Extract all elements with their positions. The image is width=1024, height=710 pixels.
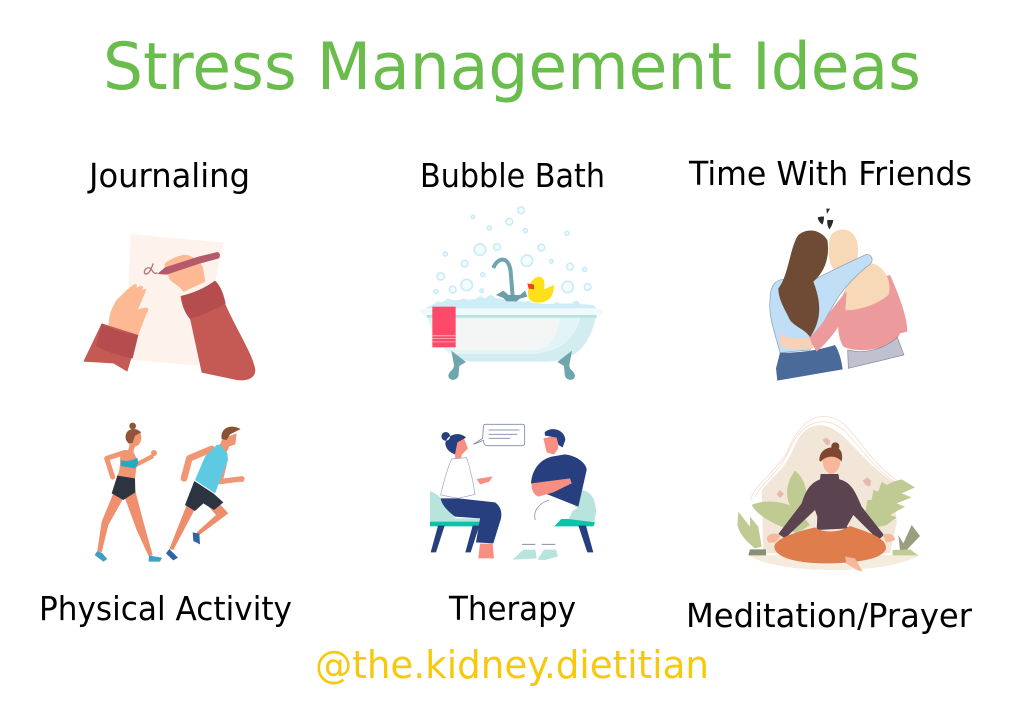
tub panel — [455, 319, 560, 350]
left cuff — [96, 323, 138, 358]
label: Time With Friends: Time With Friends — [688, 154, 972, 193]
woman shoes — [95, 551, 162, 562]
legs — [774, 526, 886, 563]
man hair — [221, 427, 241, 440]
therapist — [441, 432, 501, 558]
foot — [845, 557, 863, 571]
foam — [425, 295, 597, 308]
client arms — [532, 478, 572, 497]
client ankles — [522, 543, 555, 546]
plants — [737, 471, 920, 555]
halo outlines — [751, 416, 897, 500]
right hand — [165, 255, 205, 292]
tub legs — [448, 351, 575, 380]
hands — [767, 534, 895, 543]
man back arm — [184, 449, 212, 478]
torso and arms — [778, 474, 884, 540]
therapist hair — [441, 432, 466, 454]
woman hair — [126, 423, 141, 443]
client trousers — [523, 497, 578, 543]
chairs — [430, 490, 596, 552]
halo background — [762, 425, 897, 553]
woman shorts — [112, 476, 135, 500]
therapist hand — [477, 476, 493, 484]
woman — [95, 423, 162, 562]
sparkles — [777, 437, 871, 498]
pen — [157, 252, 220, 275]
woman back arm — [107, 452, 125, 477]
left sleeve — [83, 323, 138, 372]
client shoes — [513, 550, 558, 560]
right cuff — [181, 281, 226, 319]
arm around waist — [779, 333, 813, 349]
face — [823, 453, 840, 474]
label: Journaling: Journaling — [87, 156, 250, 195]
label: Physical Activity: Physical Activity — [39, 589, 292, 628]
speech bubble — [473, 424, 525, 446]
tub body — [427, 315, 597, 362]
man head — [218, 433, 237, 452]
therapist trousers — [441, 498, 501, 543]
hair — [819, 442, 842, 462]
sparks — [818, 209, 833, 229]
left hand — [108, 284, 148, 335]
man shorts — [185, 481, 223, 511]
brown hair — [778, 230, 828, 337]
woman legs — [97, 490, 153, 556]
icon: hands writing on paper — [83, 234, 255, 380]
therapist foot — [478, 544, 494, 558]
towel — [432, 307, 456, 347]
icon: two runners — [95, 423, 245, 562]
icon: woman meditating — [737, 416, 920, 571]
blue top — [770, 254, 872, 353]
label: Therapy: Therapy — [448, 589, 576, 628]
icon: two friends hugging — [770, 209, 907, 381]
right sleeve — [190, 303, 255, 380]
pink sleeve around waist — [808, 292, 847, 352]
client shirt — [531, 454, 587, 507]
woman front arm — [134, 457, 152, 466]
icon: bathtub with rubber duck — [420, 207, 603, 380]
handwriting — [144, 263, 157, 274]
jeans — [776, 345, 843, 381]
pink sweater — [838, 275, 907, 350]
tub rim — [420, 308, 603, 315]
social handle: @the.kidney.dietitian — [315, 643, 709, 687]
grey trousers — [848, 337, 904, 368]
woman top — [121, 458, 138, 468]
faucet — [493, 260, 513, 297]
man shoes — [166, 532, 200, 560]
duck — [527, 277, 554, 303]
title: Stress Management Ideas — [103, 30, 921, 105]
icon: therapy session — [430, 424, 596, 560]
therapist face — [454, 437, 468, 459]
man — [166, 427, 245, 560]
woman neck and torso — [117, 442, 137, 478]
woman — [767, 442, 895, 571]
man legs — [169, 502, 228, 550]
tub shade — [452, 315, 597, 362]
woman head — [127, 429, 141, 447]
paper — [125, 234, 223, 365]
label: Bubble Bath: Bubble Bath — [420, 156, 605, 195]
bubbles — [434, 207, 591, 294]
man front arm — [220, 465, 240, 482]
blonde hair — [829, 230, 890, 310]
client — [513, 429, 587, 560]
client head — [543, 436, 558, 454]
label: Meditation/Prayer: Meditation/Prayer — [686, 596, 972, 635]
therapist blouse — [441, 458, 475, 498]
ground — [748, 555, 919, 570]
man vest — [195, 444, 228, 493]
